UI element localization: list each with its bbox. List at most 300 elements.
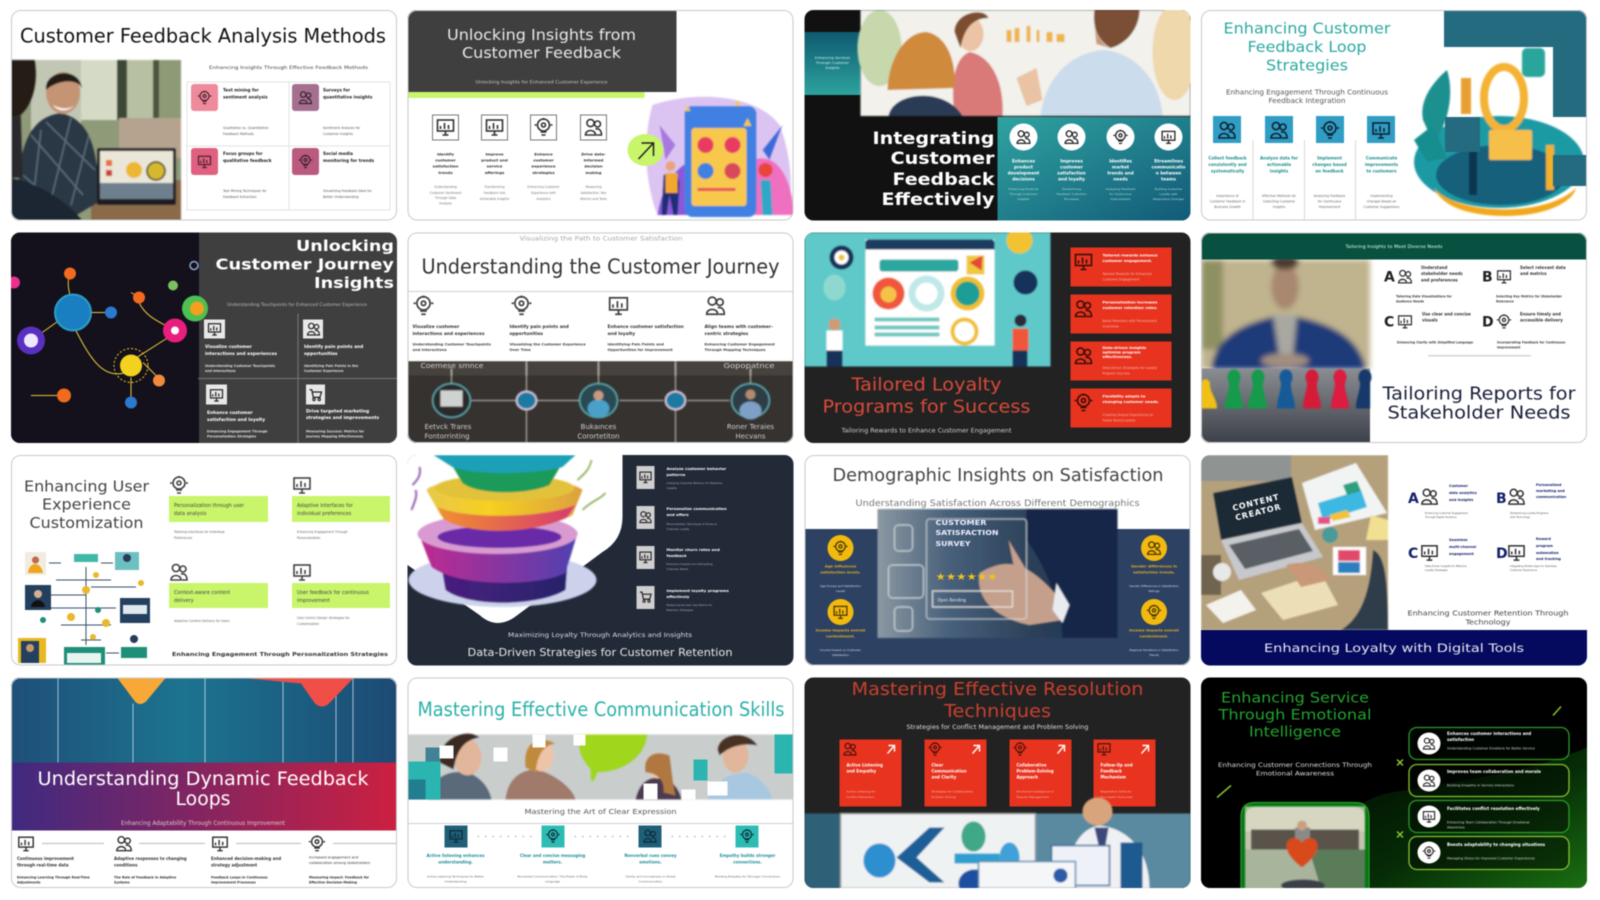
steps: Collect feedback [1208, 156, 1247, 160]
title: Unlocking [296, 237, 394, 255]
card headings: customer engagement. [1102, 258, 1153, 263]
panel: Enhancing User Experience Customization: Experience [42, 496, 131, 514]
key points: offerings [485, 170, 505, 175]
card notes: Active Listening for [846, 790, 876, 794]
step headings: Ensure timely and [1520, 312, 1561, 316]
step notes: Effective Methods for [1262, 194, 1297, 198]
notes: Analytics [536, 197, 551, 201]
benefit labels: teams [1161, 176, 1176, 182]
card notes: Managing Stress for Improved Customer Experiences [1447, 856, 1535, 860]
benefit labels: decisions [1012, 176, 1035, 182]
cell notes: Understanding Customer Touchpoints [205, 364, 275, 368]
method labels: monitoring for trends [323, 158, 375, 163]
panel: Understanding the Customer Journey: Bukaınces [581, 423, 617, 431]
gold headings: Age influences [825, 564, 857, 568]
tool notes: with Technology [1510, 515, 1531, 519]
icon: focus groups [191, 148, 218, 175]
tool notes: Through Digital Solutions [1425, 515, 1457, 519]
step headings: stakeholder needs [1421, 271, 1463, 276]
strategy notes: Measuring Success: Key Metrics for [666, 603, 713, 607]
panel: Enhancing Service Through Emotional Intelligence: Emotional Awareness [1256, 770, 1334, 778]
key points: Enhance [534, 152, 553, 156]
title: Demographic Insights on Satisfaction [832, 465, 1164, 486]
title: Enhancing Service [1221, 690, 1369, 706]
photo: team conversation [408, 734, 794, 800]
feedback points: Continuous improvement [17, 856, 74, 861]
title: Integrating [872, 129, 994, 149]
cell headings: opportunities [304, 351, 338, 357]
option text: data analysis [174, 511, 207, 517]
key points: informed [584, 158, 604, 162]
gold headings: satisfaction trends. [1133, 570, 1175, 574]
letters: B [1496, 491, 1507, 507]
panel: Unlocking Customer Journey Insights [8, 232, 397, 444]
accent marks [1217, 706, 1561, 838]
card notes: Negotiation Skills for [1100, 790, 1132, 794]
subtitle: Tailoring Rewards to Enhance Customer Engagement [840, 428, 1012, 434]
panel: Mastering Effective Communication Skills [408, 678, 794, 888]
card notes: Strategies for Collaborative [932, 790, 973, 794]
skill headings: connections. [733, 860, 762, 864]
skill notes: Nonverbal Communication: The Power of Body [518, 874, 588, 878]
method labels: quantitative insights [323, 94, 373, 100]
panel: Integrating Customer Feedback Effectively: Customer [890, 149, 995, 169]
strategy notes: Insights [666, 486, 677, 490]
survey text: CUSTOMER [936, 519, 987, 527]
step headings: visuals [1422, 318, 1438, 322]
benefit labels: Identifies [1109, 158, 1132, 164]
card headings: optimize program [1102, 350, 1141, 354]
laptop label: CONTENT [1232, 492, 1280, 513]
cell notes: Customer Experience [304, 369, 344, 373]
key points: customer [533, 158, 554, 162]
key points: Drive data- [581, 152, 606, 156]
card headings: Feedback [1100, 768, 1122, 774]
icon squares [1213, 116, 1395, 143]
card headings: Collaborative [1016, 762, 1047, 768]
tool icons [1422, 489, 1524, 560]
step headings: Use clear and concise [1422, 312, 1471, 316]
benefit notes: Streamlining [1062, 187, 1081, 191]
method notes: Sentiment Analysis for [323, 126, 361, 130]
feedback points: Enhanced decision-making and [211, 856, 281, 861]
step notes: Improvement [1319, 205, 1341, 209]
benefit notes: Insights [1018, 197, 1030, 201]
subtitle: Enhancing Insights Through Effective Feedback Methods [209, 65, 369, 71]
step notes: Importance of [1216, 194, 1240, 198]
card notes: Dispute Management [1016, 795, 1050, 799]
feedback points: Adaptive responses to changing [114, 856, 187, 861]
notes: Enhancing Customer [527, 185, 560, 189]
corner blocks [1444, 10, 1587, 186]
key points: decision [584, 164, 603, 168]
skill notes: Building Empathy for Stronger Connections [715, 874, 780, 878]
strategy headings: feedback [666, 553, 687, 558]
step headings: and preferences [1421, 278, 1458, 282]
background glow [1331, 748, 1587, 888]
panel: Enhancing Loyalty with Digital Tools [1201, 455, 1587, 666]
step notes: Customer Suggestions [1364, 205, 1400, 209]
framed photo: heart [1241, 802, 1369, 892]
method notes: Customer Insights [323, 132, 353, 136]
title: Tailoring Reports for [1381, 384, 1576, 404]
goal notes: Understanding Customer Touchpoints [412, 342, 492, 346]
cell headings: Enhance customer [207, 410, 253, 416]
letters: C [1408, 546, 1418, 562]
cell headings: satisfaction and loyalty [207, 417, 265, 423]
skill notes: Understanding [444, 880, 467, 884]
panel: Customer Feedback Analysis Methods [11, 10, 397, 221]
option text: Adaptive interfaces for [297, 503, 354, 509]
cell headings: Drive targeted marketing [306, 408, 369, 414]
laptop label: CREATOR [1234, 502, 1282, 522]
notes: Ratings [1149, 589, 1160, 593]
panel: Enhancing Loyalty with Digital Tools: Technology [1464, 618, 1510, 626]
subtitle: Unlocking Insights for Enhanced Customer Experience [476, 80, 608, 86]
step headings: Understand [1421, 265, 1447, 270]
panel: Understanding the Customer Journey: Gopopatnce [724, 362, 774, 370]
card notes: Incentives [1102, 324, 1119, 328]
option notes: Adaptive Content Delivery for Users [174, 619, 230, 623]
benefit notes: Analyzing Feedback [1106, 187, 1136, 191]
skill notes: Language [545, 880, 560, 884]
panel: Enhancing User Experience Customization: Customization [30, 514, 144, 532]
gold headings: contentment. [1140, 634, 1169, 638]
goal notes: Visualizing the Customer Experience [510, 342, 586, 346]
tool headings: Seamless [1449, 538, 1468, 542]
goal notes: Enhancing Customer Engagement [704, 342, 775, 346]
steps: systematically [1211, 168, 1244, 174]
notes: Measuring [585, 185, 602, 189]
notes: Analysis [439, 202, 452, 206]
step notes: Improvement [1497, 346, 1521, 350]
icon discs [1418, 732, 1440, 864]
navy band [1201, 630, 1587, 666]
title: Customer Feedback Analysis Methods [20, 24, 386, 48]
gold headings: satisfaction levels. [820, 570, 861, 574]
benefit notes: Improvement [1110, 197, 1131, 201]
step notes: Selecting Key Metrics for Stakeholder [1496, 294, 1563, 298]
cell notes: Measuring Success: Metrics for [306, 430, 365, 434]
arrows [888, 746, 1148, 754]
cell notes: Personalization Strategies [207, 434, 256, 438]
tool headings: Customer [1449, 484, 1468, 488]
option text: User feedback for continuous [297, 590, 369, 596]
card notes: Customer Engagement [1102, 278, 1140, 282]
method notes: Text Mining Techniques for [222, 189, 267, 193]
subtitle: Enhancing Engagement Through Continuous [1226, 88, 1388, 96]
notes: Satisfaction: Key [581, 191, 607, 195]
option notes: Customization [297, 622, 319, 626]
skill headings: Clear and concise messaging [520, 853, 585, 858]
step headings: and metrics [1520, 271, 1547, 276]
notes: Metrics and Tools [580, 197, 607, 201]
tag text: Insights [825, 66, 840, 70]
benefit labels: product [1014, 164, 1033, 170]
strategy notes: Retention Strategies [666, 608, 694, 612]
option notes: User-Centric Design Strategies for [297, 616, 350, 620]
notes: Income Impact on Customer [820, 648, 862, 652]
illustration: phone with ratings [646, 97, 794, 217]
card headings: Clear [932, 762, 943, 768]
method notes: Feedback Extraction [223, 195, 257, 199]
notes: Actionable Insights [480, 197, 510, 201]
panel: Tailoring Reports for Stakeholder Needs [1201, 232, 1587, 444]
panel: Tailored Loyalty Programs for Success: Programs for Success [822, 398, 1030, 418]
tool notes: Customer Experience [1510, 568, 1537, 572]
steps: Analyze data for [1260, 156, 1298, 160]
panel: Understanding the Customer Journey: Roner Teraies [727, 423, 774, 431]
benefit notes: Building Customer [1155, 187, 1183, 191]
fourth point: Increased engagement and [309, 856, 358, 860]
letters: D [1482, 314, 1494, 330]
notes: Through Data [434, 196, 456, 200]
subtitle: Understanding Touchpoints for Enhanced Customer Experience [227, 302, 367, 308]
card headings: Communication [932, 768, 967, 774]
key points: Improve [485, 152, 504, 156]
subtitle: Enhancing Customer Connections Through [1218, 762, 1372, 769]
card notes: Problem Solving [932, 795, 956, 799]
cell headings: strategies and improvements [306, 415, 379, 421]
card headings: changing customer needs. [1102, 399, 1160, 404]
photo: blurred presenter and pawns [1201, 256, 1372, 444]
subtitle: Enhancing Customer Retention Through [1408, 610, 1568, 618]
title band [11, 762, 397, 830]
green option boxes [169, 496, 390, 608]
map labels: Coemese smnce [420, 362, 484, 370]
benefit notes: for Continuous [1109, 192, 1132, 196]
skill notes: Clarity and Conciseness in Verbal [625, 874, 676, 878]
benefit labels: communicatio [1152, 164, 1186, 170]
method labels: Text mining for [223, 88, 260, 92]
notes: Transforming [483, 185, 505, 189]
steps: actionable [1267, 162, 1291, 167]
step notes: Implementing [1370, 194, 1393, 198]
title: Enhancing Customer [1224, 20, 1391, 38]
panel: Unlocking Customer Journey Insights: Insights [314, 274, 394, 292]
panel: Enhancing Customer Feedback Loop Strategies: Feedback Integration [1268, 97, 1346, 105]
pixel tiles [408, 734, 794, 800]
steps: Communicate [1366, 156, 1397, 160]
card notes: Tailored Rewards for Enhanced [1102, 272, 1152, 276]
benefit notes: Processes [1064, 197, 1079, 201]
skill notes: Communication [639, 880, 662, 884]
letters: C [1384, 314, 1394, 330]
card notes: Creating Unique Experiences to [1102, 413, 1153, 417]
icon tiles [636, 466, 654, 609]
cell headings: Visualize customer [205, 344, 253, 350]
panel: Understanding Dynamic Feedback Loops: Loops [176, 789, 230, 810]
icon row [432, 115, 606, 140]
panel: Understanding Dynamic Feedback Loops [11, 678, 397, 888]
notes: Levels [836, 589, 846, 593]
method notes: Feedback Methods [223, 132, 254, 136]
benefit labels: market [1112, 164, 1129, 170]
point notes: Systems [114, 880, 130, 884]
point notes: Adjustments [17, 880, 41, 884]
hero background [11, 678, 397, 764]
timeline icons [19, 835, 325, 851]
strategy headings: Personalize communication [666, 506, 727, 511]
benefit labels: Improves [1060, 158, 1083, 164]
tool headings: multi-channel [1449, 545, 1476, 549]
option text: Context-aware content [174, 590, 230, 596]
skill icon squares [444, 826, 758, 848]
card notes: Building Empathy in Service Interactions [1447, 784, 1514, 788]
key points: product and [481, 158, 508, 162]
icon row [414, 296, 724, 314]
icon: text mining [191, 84, 218, 111]
option notes: Enhancing Engagement Through [297, 530, 348, 534]
illustration: loyalty dashboard [804, 228, 1050, 366]
card notes: Awareness [1447, 826, 1465, 830]
panel: Understanding the Customer Journey: Eetvck Trares [424, 423, 472, 431]
goal notes: Opportunities for Improvement [608, 348, 673, 352]
goals: Align teams with customer- [704, 324, 773, 330]
panel: Tailoring Reports for Stakeholder Needs: Stakeholder Needs [1388, 404, 1570, 424]
skill headings: Active listening enhances [427, 853, 485, 858]
strategy headings: Implement loyalty programs [666, 588, 729, 593]
notes: Trends [1148, 653, 1159, 657]
steps: consistently and [1208, 162, 1247, 167]
goal notes: Through Mapping Techniques [704, 348, 766, 352]
tool notes: Streamlining Loyalty Programs [1510, 511, 1549, 515]
panel: Integrating Customer Feedback Effectively: Effectively [882, 190, 994, 210]
panel: Understanding the Customer Journey: Hecvans [736, 432, 766, 440]
letters: D [1496, 546, 1508, 562]
card headings: Data-driven insights [1102, 345, 1147, 350]
method notes: Visualizing Feedback Data for [323, 189, 372, 193]
strategy headings: Analyze customer behavior [666, 466, 726, 471]
key points: trends [438, 170, 453, 175]
panel: Enhancing Service Through Emotional Intelligence [1201, 678, 1587, 892]
title: Enhancing User [24, 478, 150, 496]
strategy notes: Customer Loyalty [666, 527, 690, 531]
card notes: Data-Driven Strategies for Loyalty [1102, 366, 1157, 370]
title: Enhancing Loyalty with Digital Tools [1264, 641, 1524, 655]
step icons [1399, 270, 1511, 328]
step notes: Tailoring Data Visualizations for [1396, 294, 1452, 298]
icon circles [1010, 124, 1182, 150]
goals: centric strategies [704, 331, 749, 337]
tool headings: Reward [1536, 537, 1551, 541]
steps: to customers [1366, 168, 1397, 174]
card headings: and Clarity [932, 774, 957, 780]
panel: Understanding the Customer Journey: Fontorrinting [424, 432, 470, 440]
subtitle: Enhancing Adaptability Through Continuous Improvement [121, 821, 286, 827]
point notes: Enhancing Learning Through Real-Time [17, 876, 90, 880]
key points: experience [531, 164, 556, 168]
option text: improvement [297, 598, 330, 604]
key points: strategies [532, 170, 555, 175]
illustration: node network [8, 232, 208, 443]
strategy headings: Monitor churn rates and [666, 547, 720, 552]
tagline: Visualizing the Path to Customer Satisfaction [520, 236, 683, 242]
step notes: Insights [1273, 205, 1286, 209]
tool headings: automation [1536, 551, 1559, 555]
option text: individual preferences [297, 511, 352, 517]
goal notes: Over Time [510, 348, 531, 352]
method labels: qualitative feedback [223, 158, 272, 163]
cell notes: and Interactions [205, 369, 236, 373]
card notes: Boost Retention with Personalized [1102, 319, 1157, 323]
card headings: effectiveness. [1102, 354, 1133, 359]
option notes: Personalization [297, 536, 320, 540]
notes: Experience with [531, 191, 556, 195]
skill headings: Nonverbal cues convey [624, 853, 677, 858]
gold headings: contentment. [826, 634, 856, 638]
side tag [804, 32, 860, 95]
option notes: Tailoring Interfaces for Individual [173, 530, 225, 534]
panel: Enhancing Customer Feedback Loop Strategies [1201, 10, 1587, 220]
step headings: Select relevant data [1520, 265, 1566, 270]
photo: survey touchscreen: SURVEY [936, 540, 972, 548]
benefit labels: Streamlines [1154, 158, 1183, 164]
benefit notes: Feedback Collection [1056, 192, 1087, 196]
title: Unlocking Insights from [447, 26, 636, 44]
button label: Open Bending [938, 598, 966, 602]
cell headings: Identify pain points and [304, 344, 363, 350]
title: Tailored Loyalty [850, 376, 1001, 396]
tool headings: data analytics [1449, 491, 1477, 495]
card headings: Problem-Solving [1016, 768, 1054, 774]
notes: Feedback into [484, 191, 505, 195]
step notes: Audience Needs [1396, 300, 1424, 304]
photo: survey touchscreen: SATISFACTION [936, 529, 999, 537]
tag text: Enhancing Services [815, 56, 850, 60]
tag text: Through Customer [815, 61, 850, 65]
panel: Data-Driven Strategies for Customer Retention [408, 455, 794, 666]
strategy headings: effectively [666, 594, 690, 599]
benefit labels: n between [1156, 170, 1181, 176]
gold headings: Gender differences in [1131, 564, 1177, 568]
tool notes: Data-Driven Insights for Effective [1425, 564, 1467, 568]
card headings: Mechanism [1100, 774, 1126, 780]
panel: Integrating Customer Feedback Effectively [804, 4, 1196, 221]
skill headings: matters. [543, 860, 563, 864]
strategy notes: Personalization Techniques to Enhance [666, 522, 717, 526]
card headings: Flexibility adapts to [1102, 394, 1146, 398]
title: Mastering Effective Communication Skills [418, 698, 784, 721]
goals: Visualize customer [412, 324, 460, 330]
cell notes: Journey Mapping Effectiveness [305, 434, 363, 438]
panel: Unlocking Insights from Customer Feedback [408, 10, 794, 220]
steps: on feedback [1315, 168, 1344, 174]
red cards [1070, 248, 1172, 428]
goals: Identify pain points and [510, 324, 569, 330]
card headings: customer retention rates. [1102, 305, 1158, 310]
point notes: Improvement Processes [211, 880, 256, 884]
accent bar [408, 92, 644, 98]
method labels: Social media [323, 151, 353, 156]
panel: Understanding the Customer Journey [408, 232, 794, 444]
card headings: Active Listening [846, 762, 883, 768]
strategy notes: Predictive Analytics for Anticipating [666, 562, 713, 566]
panel: Enhancing Customer Feedback Loop Strategies: Strategies [1266, 56, 1348, 74]
benefit notes: Through Customer [1009, 192, 1038, 196]
card headings: Personalization increases [1102, 300, 1158, 304]
step notes: Incorporating Feedback for Continuous [1497, 340, 1565, 344]
tool notes: Loyalty Strategies [1425, 568, 1448, 572]
point notes: Feedback Loops in Continuous [211, 876, 268, 880]
cell headings: interactions and experiences [205, 351, 277, 357]
panel: Mastering Effective Resolution Techniques [804, 678, 1190, 898]
goals: opportunities [510, 331, 543, 337]
panel: Unlocking Insights from Customer Feedback: Customer Feedback [462, 44, 621, 62]
card notes: Successful Outcomes [1100, 795, 1133, 799]
benefit labels: needs [1113, 176, 1128, 182]
dividers [1253, 140, 1356, 220]
